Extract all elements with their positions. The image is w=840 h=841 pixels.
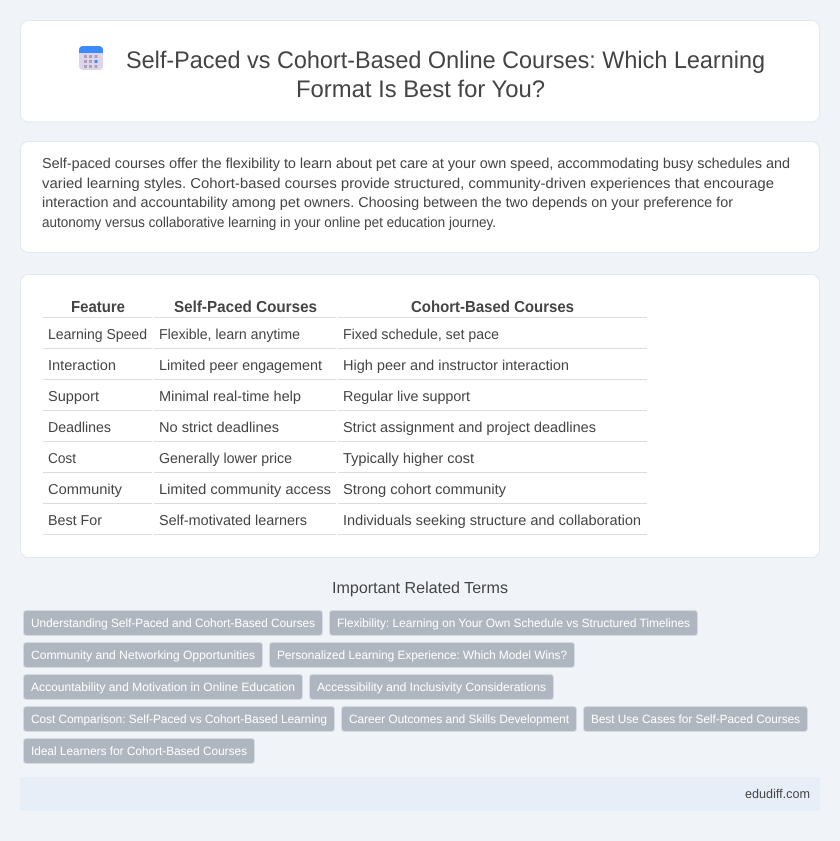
tag: Community and Networking Opportunities — [31, 648, 255, 662]
table header: Cohort-Based Courses — [411, 299, 574, 316]
row: community: Community — [48, 482, 123, 498]
tag: Understanding Self-Paced and Cohort-Based Courses — [31, 616, 315, 630]
row: community — [48, 482, 507, 498]
tag: Flexibility: Learning on Your Own Schedule vs Structured Timelines — [337, 616, 690, 630]
tag — [342, 706, 576, 732]
text block: introduction paragraph: Self-paced courses offer the flexibility to learn about pet care at your own speed, accommodating busy schedules and — [42, 156, 790, 172]
table header: Feature — [71, 299, 125, 316]
tag — [24, 674, 302, 700]
title: Format Is Best for You? — [296, 76, 545, 103]
tag: Personalized Learning Experience: Which Model Wins? — [277, 648, 567, 662]
row: support: Minimal real-time help — [159, 389, 301, 405]
tag: Accessibility and Inclusivity Considerations — [317, 680, 546, 694]
tag — [24, 706, 334, 732]
row: support: Regular live support — [343, 389, 470, 405]
tag — [24, 610, 322, 636]
title: Self-Paced vs Cohort-Based Online Courses: Which Learning — [126, 47, 765, 74]
tag — [310, 674, 554, 700]
footer: edudiff.com — [745, 786, 810, 801]
row: interaction — [48, 358, 569, 374]
text block: introduction paragraph — [42, 156, 790, 231]
row: interaction: Interaction — [48, 358, 116, 374]
row: cost: Cost — [48, 451, 76, 467]
tag — [584, 706, 808, 732]
tag — [330, 610, 698, 636]
icon: calendar — [79, 46, 103, 70]
tag: Accountability and Motivation in Online Education — [31, 680, 295, 694]
tag: Best Use Cases for Self-Paced Courses — [591, 712, 800, 726]
row: support: Support — [48, 389, 99, 405]
row: learning speed: Flexible, learn anytime — [159, 327, 300, 343]
row: learning speed: Learning Speed — [48, 327, 147, 343]
tags: related terms — [24, 610, 808, 764]
row: interaction: High peer and instructor interaction — [343, 358, 569, 374]
tag: Cost Comparison: Self-Paced vs Cohort-Based Learning — [31, 712, 327, 726]
panel: introduction — [20, 142, 820, 252]
row: deadlines: Strict assignment and project deadlines — [343, 420, 596, 436]
panel: title header — [20, 20, 820, 122]
row: cost: Typically higher cost — [343, 451, 474, 467]
row: deadlines — [48, 420, 596, 436]
heading: important related terms: Important Related Terms — [332, 580, 508, 597]
footer — [20, 777, 820, 811]
row: cost — [48, 451, 474, 467]
text block: introduction paragraph: varied learning styles. Cohort-based courses provide structured, community-driven experiences that encourage — [42, 176, 774, 192]
row: cost: Generally lower price — [159, 451, 292, 467]
row: support — [48, 389, 470, 405]
title — [126, 47, 765, 103]
tag — [24, 738, 254, 764]
panel: comparison table — [20, 274, 820, 558]
row: interaction: Limited peer engagement — [159, 358, 322, 374]
tag — [24, 642, 262, 668]
text block: introduction paragraph: interaction and accountability among pet owners. Choosing between the two depends on your preference for — [42, 195, 733, 211]
row: best for: Self-motivated learners — [159, 513, 307, 529]
row: best for: Best For — [48, 513, 102, 529]
row: deadlines: Deadlines — [48, 420, 111, 436]
text block: introduction paragraph: autonomy versus collaborative learning in your online pet education journey. — [42, 215, 496, 231]
tag: Ideal Learners for Cohort-Based Courses — [31, 744, 247, 758]
row: learning speed: Fixed schedule, set pace — [343, 327, 499, 343]
row: learning speed — [48, 327, 499, 343]
row: best for — [48, 513, 641, 529]
row: best for: Individuals seeking structure and collaboration — [343, 513, 641, 529]
table header: Self-Paced Courses — [174, 299, 317, 316]
tag — [270, 642, 574, 668]
row: community: Strong cohort community — [343, 482, 507, 498]
row: deadlines: No strict deadlines — [159, 420, 279, 436]
tag: Career Outcomes and Skills Development — [349, 712, 570, 726]
table header — [71, 299, 574, 316]
row: community: Limited community access — [159, 482, 331, 498]
